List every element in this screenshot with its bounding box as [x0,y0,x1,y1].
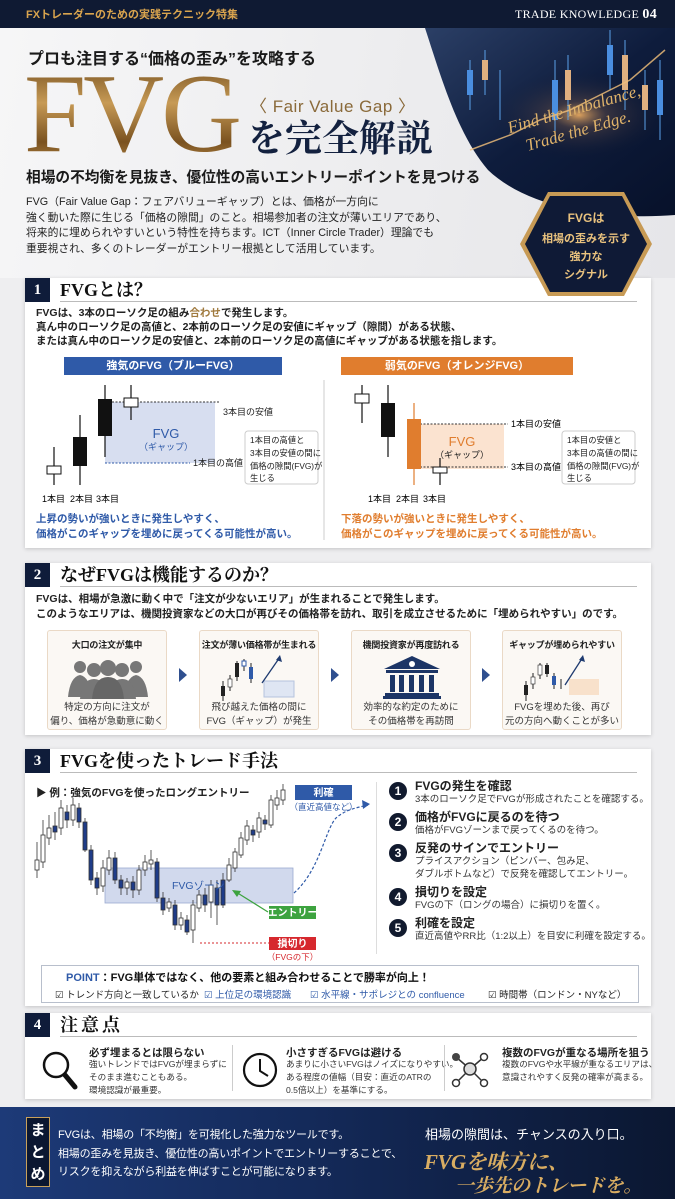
summary band: 一歩先のトレードを。 [455,1176,642,1197]
intro paragraph: 重要視され、多くのトレーダーがエントリー根拠として活用しています。 [26,243,381,255]
candle diagrams section 1 [42,380,640,540]
panel 4: 注意点 [25,1013,651,1099]
POINT box: ☑ 上位足の環境認識 [204,990,291,1001]
candle diagrams section 1: 3本目 [96,493,119,504]
intro paragraph: FVG（Fair Value Gap：フェアバリューギャップ）とは、価格が一方向に [26,196,379,208]
summary text [58,1128,402,1178]
icon: clock [242,1052,278,1088]
item 3: 複数のFVGが重なる場所を狙う [502,1047,650,1059]
card: 機関投資家: 効率的な約定のために [363,702,458,713]
card: 注文が薄い価格帯: 飛び越えた価格の間に [211,702,306,713]
Fair Value Gap subtitle: 〈 Fair Value Gap 〉 [250,97,416,116]
card: 注文が薄い価格帯: 注文が薄い価格帯が生まれる [202,640,316,650]
POINT box [41,965,639,1003]
candle diagrams section 1: 生じる [567,473,592,483]
item 2: 小さすぎるFVGは避ける [286,1047,402,1059]
POINT box: POINT：FVG単体ではなく、他の要素と組み合わせることで勝率が向上！ [66,972,430,984]
card: ギャップが埋められやすい: 元の方向へ動くことが多い [505,716,619,727]
steps list: 損切りを設定 [415,885,487,899]
item 1: そのまま進むこともある。 [89,1072,192,1082]
item 2: 0.5倍以上）を基準にする。 [286,1085,393,1095]
trade chart [34,784,370,962]
intro paragraph [26,196,447,255]
header right text: TRADE KNOWLEDGE 04 [515,7,657,22]
panel 3: トレード手法: FVGを使ったトレード手法 [60,751,278,771]
summary text: FVGは、相場の「不均衡」を可視化した強力なツールです。 [58,1129,349,1141]
summary band [0,1107,675,1199]
card: 大口の注文が集中: 特定の方向に注文が [64,702,150,713]
card: 大口の注文が集中: 大口の注文が集中 [72,640,142,650]
candle diagrams section 1: 3本目の安値の間に [250,448,321,458]
candle diagrams section 1: 2本目 [396,493,419,504]
panel 1: FVGとは: FVGとは？ [60,280,152,300]
card: 注文が薄い価格帯 [199,630,319,730]
explanation text: FVGは、相場が急激に動く中で「注文が少ないエリア」が生まれることで発生します。 [36,593,445,605]
panel 3: トレード手法: 3 [34,753,41,769]
step 5 [389,916,651,942]
steps list: FVGの発生を確認 [415,779,512,793]
POINT box: ☑ 時間帯（ロンドン・NYなど） [488,990,626,1001]
card: ギャップが埋められやすい: ギャップが埋められやすい [509,640,615,650]
item 2: ある程度の値幅（目安：直近のATRの [286,1072,431,1082]
panel 1: FVGとは [25,278,651,548]
explanation text: このようなエリアは、機関投資家などの大口が再びその価格帯を訪れ、取引を成立させるために「埋められやすい」のです。 [36,608,623,620]
card: ギャップが埋められやすい [502,630,622,730]
trade chart: FVGゾーン [172,880,225,892]
candle diagrams section 1: 生じる [250,473,275,483]
script tagline: Find the Imbalance, [505,81,643,137]
definition text: または真ん中のローソク足の安値と、2本前のローソク足の高値にギャップがある状態を指します。 [36,335,502,347]
candle diagrams section 1: 1本目の高値 [193,457,243,468]
steps list: 1 [395,784,401,798]
candle diagrams section 1: FVG [449,434,475,449]
POINT box: ☑ トレンド方向と一致しているか [55,990,199,1001]
steps list: プライスアクション（ピンバー、包み足、 [415,856,595,867]
steps list: ダブルボトムなど）で反発を確認してエントリー。 [415,868,633,880]
candle diagrams section 1: 1本目の安値と [567,435,621,445]
trade chart: 利確 [314,786,334,799]
steps list: FVGの下（ロングの場合）に損切りを置く。 [415,900,606,911]
icon: crowd [68,660,148,699]
bearish header: 弱気のFVG（オレンジFVG） [385,360,529,372]
arrow 2 [331,668,339,682]
eyebrow headline: プロも注目する“価格の歪み”を攻略する [28,51,316,68]
chart caption: ▶ 例：強気のFVGを使ったロングエントリー [36,787,250,799]
bullish header [64,357,282,375]
right footer text: 価格がこのギャップを埋めに戻ってくる可能性が高い。 [341,528,602,540]
step 1 [389,779,649,805]
まとめ label: と [30,1144,46,1161]
arrow 3 [482,668,490,682]
panel 4: 注意点: 注意点 [60,1015,123,1035]
candle diagrams section 1: （ギャップ） [139,442,193,452]
gold slogan: FVGを味方に、 [424,1150,568,1174]
icon: gap fill [524,655,599,701]
header left text: FXトレーダーのための実践テクニック特集 [26,9,238,21]
summary text: リスクを抑えながら利益を伸ばすことが可能になります。 [58,1166,338,1178]
item 3 [452,1046,657,1088]
panel 2: なぜFVGは機能するのか: 2 [34,567,41,583]
right footer text [341,512,602,540]
left footer text: 価格がこのギャップを埋めに戻ってくる可能性が高い。 [36,528,297,540]
step 4 [389,885,606,911]
candle diagrams section 1: 1本目 [368,493,391,504]
icon: network nodes [452,1052,488,1088]
candle diagrams section 1: FVG [153,426,179,441]
definition text: 真ん中のローソク足の高値と、2本前のローソク足の安値にギャップ（隙間）がある状態、 [36,321,461,333]
card: 大口の注文が集中: 偏り、価格が急動意に動く [50,716,164,727]
item 1: 強いトレンドではFVGが埋まらずに [89,1059,227,1069]
trade chart: （直近高値など） [289,802,358,812]
top bar [0,0,675,28]
definition text [36,307,502,347]
panel 3: トレード手法 [25,749,651,1006]
candle diagrams section 1: （ギャップ） [435,450,489,460]
bullish header: 強気のFVG（ブルーFVG） [106,360,240,372]
steps list: 価格がFVGに戻るのを待つ [415,810,560,824]
hero image: market chart [425,28,675,216]
closing catch: 相場の隙間は、チャンスの入り口。 [425,1127,633,1142]
icon: bank building [383,656,441,699]
item 1 [42,1047,227,1095]
card: 機関投資家: 機関投資家が再度訪れる [363,640,459,650]
script tagline: Trade the Edge. [524,107,633,155]
big FVG title: FVG [24,52,239,176]
candle diagrams section 1: 2本目 [70,493,93,504]
left footer text [36,512,297,540]
intro paragraph: 将来的に埋められやすいという特性を持ちます。ICT（Inner Circle Trader）理論でも [26,227,434,239]
candle diagrams section 1: 価格の隙間(FVG)が [567,461,640,471]
まとめ label: ま [30,1122,46,1139]
item 2: あまりに小さいFVGはノイズになりやすい。 [286,1059,458,1069]
step 2 [389,810,604,836]
hexagon badge: シグナル [564,267,608,281]
candle diagrams section 1: 1本目の高値と [250,435,304,445]
candle diagrams section 1: 3本目 [423,493,446,504]
steps list: 反発のサインでエントリー [415,841,559,855]
steps list: 利確を設定 [415,916,475,930]
divider [376,782,377,954]
panel 2: なぜFVGは機能するのか [25,563,651,735]
left footer text: 上昇の勢いが強いときに発生しやすく、 [36,513,225,525]
hexagon badge [520,192,652,296]
hexagon badge: 相場の歪みを示す [542,231,630,245]
definition text: FVGは、3本のローソク足の組み合わせで発生します。 [36,307,293,319]
card: ギャップが埋められやすい: FVGを埋めた後、再び [514,702,610,713]
trade chart: 損切り [278,937,308,950]
まとめ label: め [30,1166,46,1183]
candle diagrams section 1: 1本目 [42,493,65,504]
steps list: 3本のローソク足でFVGが形成されたことを確認する。 [415,794,649,805]
item 3: 複数のFVGや水平線が重なるエリアは、 [502,1059,657,1069]
panel 4: 注意点: 4 [34,1017,41,1033]
panel 2: なぜFVGは機能するのか: なぜFVGは機能するのか？ [60,565,278,585]
panel 1: FVGとは: 1 [34,282,41,298]
card: 機関投資家 [351,630,471,730]
hero background [0,28,675,278]
trade chart: エントリー [268,908,318,919]
candle diagrams section 1: 3本目の高値の間に [567,448,638,458]
arrow 1 [179,668,187,682]
steps list: 価格がFVGゾーンまで戻ってくるのを待つ。 [415,825,604,836]
まとめ label [26,1117,50,1187]
steps list: 2 [395,815,401,829]
candle diagrams section 1: 3本目の安値 [223,406,273,417]
steps list: 4 [395,890,401,904]
card: 大口の注文が集中 [47,630,167,730]
steps list [389,779,651,942]
icon: magnifier [42,1052,78,1090]
POINT box: ☑ 水平線・サポレジとの confluence [310,990,465,1001]
card: 注文が薄い価格帯: FVG（ギャップ）が発生 [206,716,312,727]
candle diagrams section 1: 1本目の安値 [511,418,561,429]
item 1: 環境認識が最重要。 [89,1085,166,1095]
item 3: 意識されやすく反発の確率が高まる。 [502,1072,648,1082]
explanation text [36,592,623,620]
steps list: 直近高値やRR比（1:2以上）を目安に利確を設定する。 [415,931,651,942]
candle diagrams section 1: 価格の隙間(FVG)が [250,461,323,471]
hexagon badge: FVGは [568,211,604,225]
candle diagrams section 1: 3本目の高値 [511,461,561,472]
subtitle: 相場の不均衡を見抜き、優位性の高いエントリーポイントを見つける [26,170,480,186]
item 2 [242,1047,458,1095]
steps list: 3 [395,846,401,860]
を完全解説: を完全解説 [248,119,433,160]
steps list: 5 [395,921,401,935]
item 1: 必ず埋まるとは限らない [89,1047,204,1059]
card: 機関投資家: その価格帯を再訪問 [368,716,454,727]
summary text: 相場の歪みを見抜き、優位性の高いポイントでエントリーすることで、 [58,1148,402,1160]
bearish header [341,357,573,375]
hexagon badge: 強力な [570,249,602,263]
intro paragraph: 強く動いた際に生じる「価格の隙間」のこと。相場参加者の注文が薄いエリアであり、 [26,212,447,224]
trade chart: （FVGの下） [267,952,318,962]
step 3 [389,841,633,880]
icon: candles with gap [221,655,294,701]
right footer text: 下落の勢いが強いときに発生しやすく、 [341,513,530,525]
